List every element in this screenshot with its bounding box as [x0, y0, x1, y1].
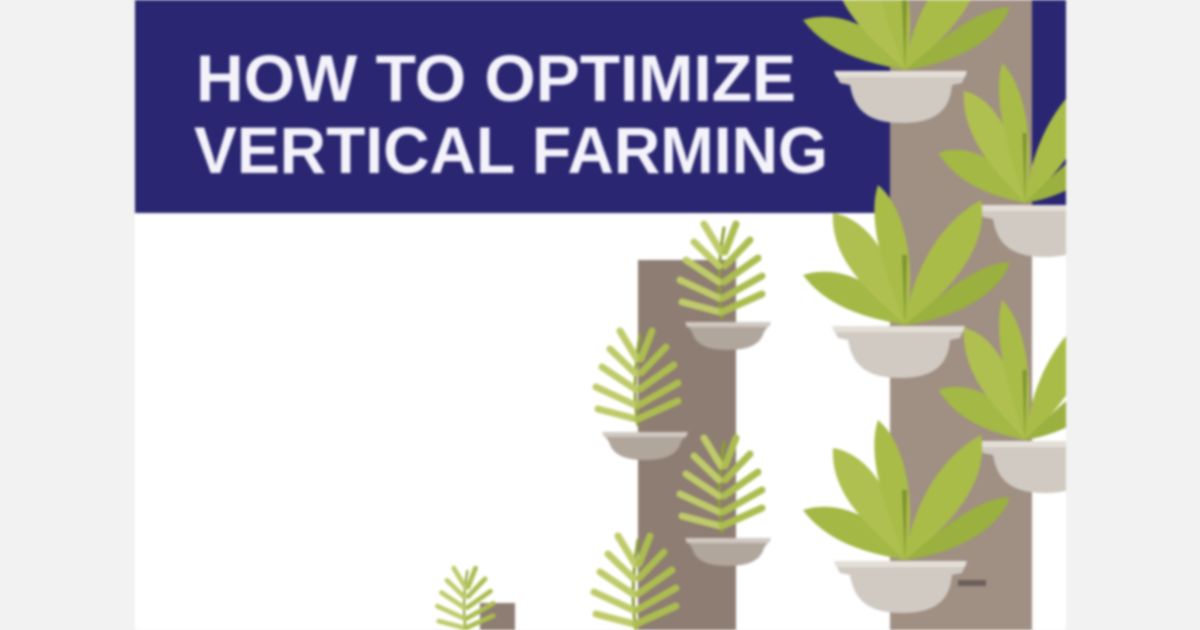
small plants — [437, 224, 771, 630]
navy title banner — [135, 0, 1066, 213]
title: HOW TO OPTIMIZE — [196, 41, 796, 115]
large tower column — [890, 0, 1032, 630]
title — [193, 53, 826, 176]
large plants and pots — [802, 0, 1068, 614]
white panel — [135, 213, 1066, 630]
small tower column left — [638, 260, 736, 630]
shortest tower column — [480, 603, 515, 630]
infographic scene — [133, 0, 1068, 630]
title: VERTICAL FARMING — [194, 113, 828, 187]
